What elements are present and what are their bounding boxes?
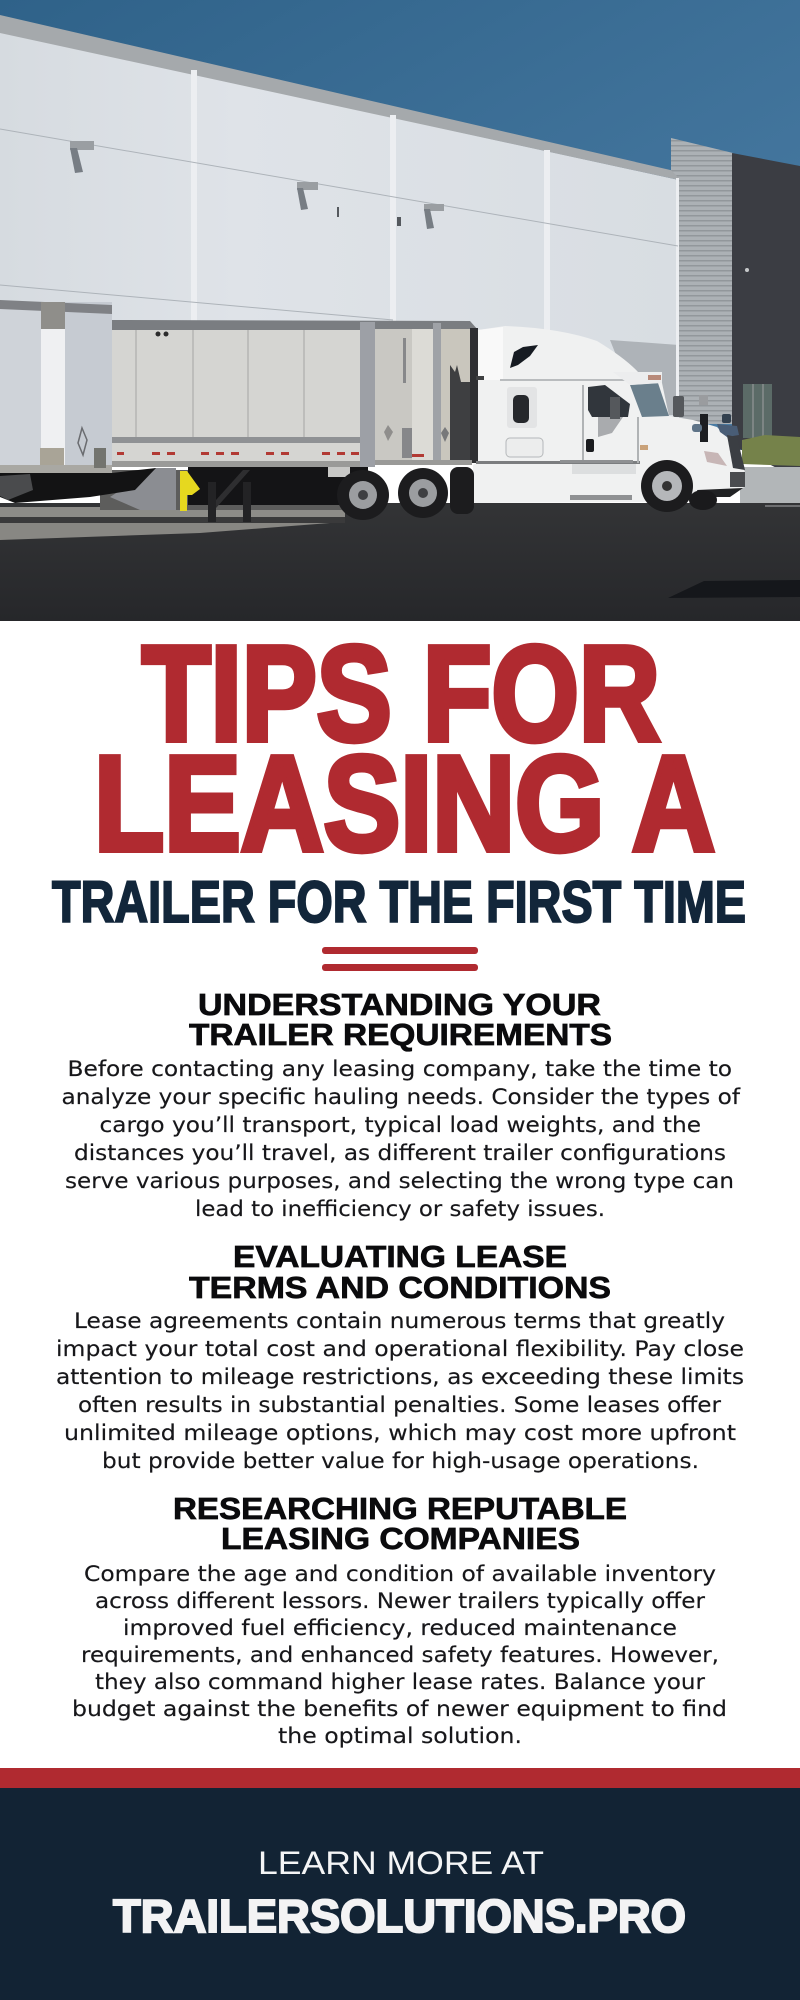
section 3 body: requirements, and enhanced safety features. However,	[81, 1643, 719, 1667]
section 1 body: Before contacting any leasing company, take the time to	[68, 1057, 732, 1081]
section 3 heading	[173, 1492, 627, 1556]
section 1 heading	[189, 988, 612, 1052]
section 2 heading	[189, 1240, 611, 1305]
section 3 heading: RESEARCHING REPUTABLE	[173, 1492, 627, 1526]
title: tips for leasing a	[94, 618, 715, 879]
learn more at: LEARN MORE AT	[258, 1845, 544, 1881]
section 2 body: often results in substantial penalties. Some leases offer	[78, 1393, 721, 1417]
section 2 body: impact your total cost and operational flexibility. Pay close	[56, 1337, 744, 1361]
section 2 body: but provide better value for high-usage operations.	[102, 1449, 699, 1473]
section 3 body	[72, 1562, 727, 1748]
section 2 body: unlimited mileage options, which may cost more upfront	[64, 1421, 736, 1445]
section 1 body: analyze your specific hauling needs. Consider the types of	[62, 1085, 741, 1109]
section 3 body: the optimal solution.	[278, 1724, 522, 1748]
section 2 body	[56, 1309, 744, 1473]
section 2 body: Lease agreements contain numerous terms that greatly	[74, 1309, 725, 1333]
section 3 heading: LEASING COMPANIES	[221, 1522, 580, 1556]
left trailer	[0, 300, 112, 473]
section 1 body	[62, 1057, 741, 1221]
footer band	[0, 1768, 800, 2000]
section 1 heading: UNDERSTANDING YOUR	[198, 988, 601, 1022]
navy footer panel	[0, 1788, 800, 2000]
section 2 heading: EVALUATING LEASE	[233, 1240, 567, 1274]
section 1 body: cargo you’ll transport, typical load weights, and the	[100, 1113, 701, 1137]
dark building	[732, 153, 800, 480]
section 1 body: serve various purposes, and selecting the wrong type can	[65, 1169, 734, 1193]
section 3 body: improved fuel efficiency, reduced maintenance	[123, 1616, 677, 1640]
grey ribbed panel	[671, 138, 733, 424]
section 3 body: Compare the age and condition of available inventory	[84, 1562, 716, 1586]
section 2 heading: TERMS AND CONDITIONS	[189, 1271, 611, 1305]
truck wheels	[328, 460, 717, 520]
section 2 body: attention to mileage restrictions, as exceeding these limits	[56, 1365, 744, 1389]
title: tips for leasing a: TIPS FOR	[142, 618, 660, 769]
warehouse wall	[0, 15, 680, 420]
trailer marker lights	[117, 452, 424, 457]
section 3 body: they also command higher lease rates. Balance your	[95, 1670, 705, 1694]
shrubs and low wall	[740, 435, 800, 503]
main trailer	[112, 320, 478, 467]
section 1 body: lead to inefficiency or safety issues.	[195, 1197, 605, 1221]
apron and asphalt	[0, 503, 800, 621]
section 3: researching reputable leasing companies	[72, 1492, 727, 1748]
sky	[0, 0, 800, 450]
section 1: understanding your trailer requirements	[62, 988, 741, 1221]
hero photo: truck and trailers at warehouse dock	[0, 0, 800, 621]
section 1 body: distances you’ll travel, as different trailer configurations	[74, 1141, 726, 1165]
double divider	[322, 947, 478, 971]
section 2: evaluating lease terms and conditions	[56, 1240, 744, 1473]
wall lights	[70, 141, 720, 271]
section 3 body: across different lessors. Newer trailers typically offer	[95, 1589, 705, 1613]
section 1 heading: TRAILER REQUIREMENTS	[189, 1018, 612, 1052]
red stripe	[0, 1768, 800, 1788]
section 3 body: budget against the benefits of newer equipment to find	[72, 1697, 727, 1721]
dock ramp and undercarriage	[0, 467, 368, 522]
truck cab	[473, 326, 745, 503]
website url: TRAILERSOLUTIONS.PRO	[113, 1890, 686, 1942]
